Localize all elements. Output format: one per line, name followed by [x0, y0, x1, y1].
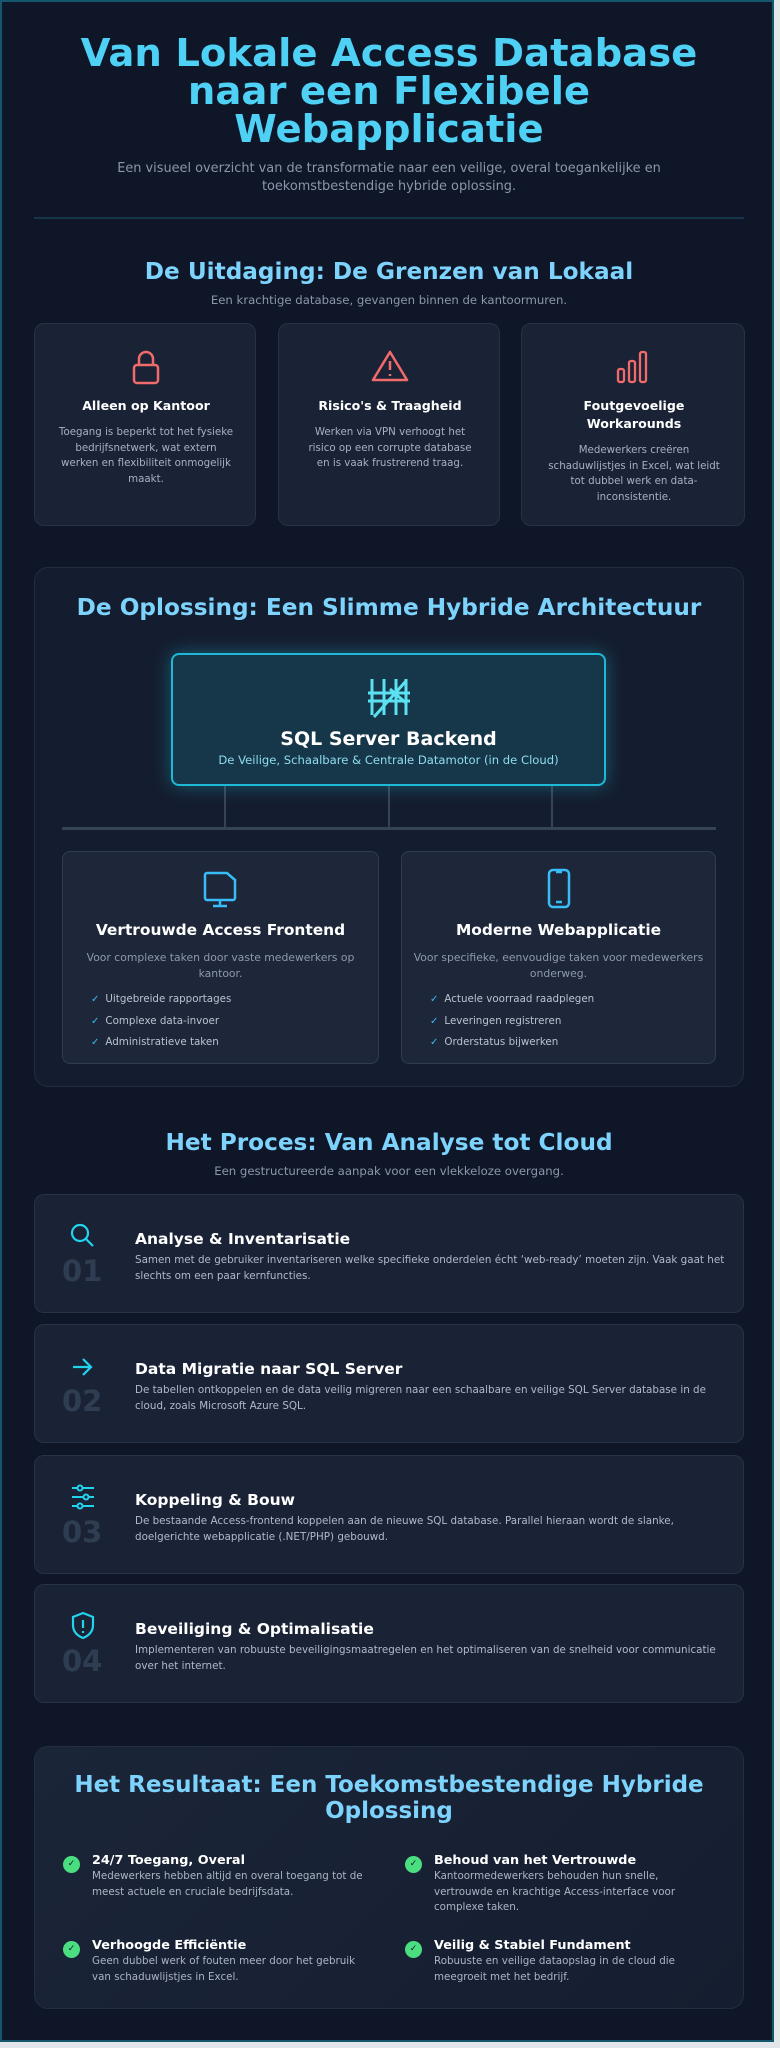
icon: arrow [73, 1358, 92, 1376]
result item 4: ✓ [410, 1944, 417, 1954]
icon: monitor [204, 872, 236, 908]
heading: result: Het Resultaat: Een Toekomstbestendige Hybride [74, 1772, 704, 1798]
icon: shield [72, 1612, 94, 1640]
icon: phone [548, 868, 570, 908]
result item 3: Verhoogde Efficiëntie [92, 1938, 246, 1953]
challenge subtitle: Een krachtige database, gevangen binnen de kantoormuren. [211, 293, 567, 307]
card: access frontend: ✓ Uitgebreide rapportages [91, 993, 231, 1005]
card: web app: Voor specifieke, eenvoudige taken voor medewerkers onderweg. [414, 951, 703, 980]
process subtitle: Een gestructureerde aanpak voor een vlekkeloze overgang. [214, 1164, 564, 1178]
step 2: De tabellen ontkoppelen en de data veilig migreren naar een schaalbare en veilige SQL Server database in de cloud, zoals Microsoft Azure SQL. [135, 1384, 706, 1412]
card: access frontend: Voor complexe taken door vaste medewerkers op kantoor. [87, 951, 354, 980]
step 3 [34, 1455, 744, 1574]
result item 3: ✓ [68, 1944, 75, 1954]
result item 3 [63, 1938, 355, 1982]
card: web app: Moderne Webapplicatie [456, 921, 661, 939]
step 4: Beveiliging & Optimalisatie [135, 1620, 374, 1638]
result item 2 [405, 1853, 676, 1913]
step 1: Samen met de gebruiker inventariseren welke specifieke onderdelen écht ‘web-ready’ moeten zijn. Vaak gaat het slechts om een paar kernfuncties. [135, 1254, 724, 1282]
card: access frontend: ✓ Complexe data-invoer [91, 1014, 219, 1026]
step 1: Analyse & Inventarisatie [135, 1230, 350, 1248]
panel: challenge cards [34, 323, 745, 526]
card: access frontend: ✓ Administratieve taken [91, 1036, 219, 1048]
result item 1: 24/7 Toegang, Overal [92, 1853, 245, 1868]
result item 1: Medewerkers hebben altijd en overal toegang tot de meest actuele en cruciale bedrijfsdata. [92, 1870, 363, 1898]
card: workarounds [521, 323, 745, 526]
step 1 [34, 1194, 744, 1313]
card: web app: ✓ Leveringen registreren [430, 1014, 561, 1026]
step 4 [34, 1584, 744, 1703]
icon: lock [132, 350, 160, 384]
result item 4: Veilig & Stabiel Fundament [434, 1938, 631, 1953]
card: workarounds: Foutgevoelige [584, 398, 684, 413]
title: Van Lokale Access Database [81, 31, 697, 76]
panel: result [34, 1746, 744, 2009]
card: web app: ✓ Actuele voorraad raadplegen [430, 993, 594, 1005]
title [80, 31, 697, 152]
card: risico's: Risico's & Traagheid [318, 398, 462, 413]
title: naar een Flexibele [188, 69, 590, 114]
card: risico's [278, 323, 500, 526]
panel: solution [34, 567, 744, 1087]
card: risico's: Werken via VPN verhoogt het risico op een corrupte database en is vaak frustrerend traag. [308, 426, 472, 469]
result item 3: Geen dubbel werk of fouten meer door het gebruik van schaduwlijstjes in Excel. [92, 1955, 355, 1982]
card: access frontend: Vertrouwde Access Frontend [96, 921, 345, 939]
step 1: 01 [62, 1254, 102, 1288]
card: web app: ✓ Orderstatus bijwerken [430, 1036, 558, 1048]
subtitle: toekomstbestendige hybride oplossing. [262, 179, 516, 194]
card: access frontend [62, 851, 379, 1064]
heading: process: Het Proces: Van Analyse tot Cloud [165, 1129, 613, 1156]
SQL server box: SQL Server Backend [280, 728, 497, 750]
step 4: Implementeren van robuuste beveiligingsmaatregelen en het optimaliseren van de snelheid voor communicatie over het internet. [135, 1644, 716, 1672]
card: alleen op kantoor: Alleen op Kantoor [82, 398, 210, 413]
step 2: 02 [62, 1384, 102, 1418]
step 3: 03 [62, 1515, 102, 1549]
card: workarounds: Medewerkers creëren schaduwlijstjes in Excel, wat leidt tot dubbel werk en data-inconsistentie. [548, 444, 720, 502]
SQL server box [171, 653, 606, 786]
step 3: Koppeling & Bouw [135, 1491, 295, 1509]
result item 4 [405, 1938, 675, 1982]
icon: sliders [72, 1484, 94, 1510]
icon: database [368, 679, 410, 718]
subtitle [117, 161, 661, 194]
step 2 [34, 1324, 744, 1443]
card: alleen op kantoor [34, 323, 256, 526]
result item 1 [63, 1853, 363, 1898]
heading: challenge: De Uitdaging: De Grenzen van Lokaal [145, 258, 633, 285]
heading: result: Oplossing [325, 1798, 453, 1824]
subtitle: Een visueel overzicht van de transformatie naar een veilige, overal toegankelijke en [117, 161, 661, 176]
card: alleen op kantoor: Toegang is beperkt tot het fysieke bedrijfsnetwerk, wat extern werken en flexibiliteit onmogelijk maakt. [59, 426, 233, 484]
SQL server box: De Veilige, Schaalbare & Centrale Datamotor (in de Cloud) [218, 753, 559, 767]
icon: bar chart [616, 350, 648, 384]
connector lines [62, 786, 716, 830]
card: web app [401, 851, 716, 1064]
title: Webapplicatie [234, 107, 544, 152]
result item 2: ✓ [410, 1859, 417, 1869]
card: workarounds: Workarounds [587, 416, 681, 431]
result item 2: Kantoormedewerkers behouden hun snelle, vertrouwde en krachtige Access-interface voor complexe taken. [434, 1870, 675, 1913]
step 4: 04 [62, 1644, 102, 1678]
result item 1: ✓ [68, 1859, 75, 1869]
result item 2: Behoud van het Vertrouwde [434, 1853, 636, 1868]
result item 4: Robuuste en veilige dataopslag in de cloud die meegroeit met het bedrijf. [434, 1955, 675, 1982]
icon: warning [372, 350, 408, 382]
step 3: De bestaande Access-frontend koppelen aan de nieuwe SQL database. Parallel hieraan wordt de slanke, doelgerichte webapplicatie (.NET/PHP) gebouwd. [135, 1515, 674, 1543]
step 2: Data Migratie naar SQL Server [135, 1360, 402, 1378]
icon: search [70, 1224, 94, 1247]
heading: solution: De Oplossing: Een Slimme Hybride Architectuur [77, 594, 701, 621]
heading: result [74, 1772, 704, 1824]
